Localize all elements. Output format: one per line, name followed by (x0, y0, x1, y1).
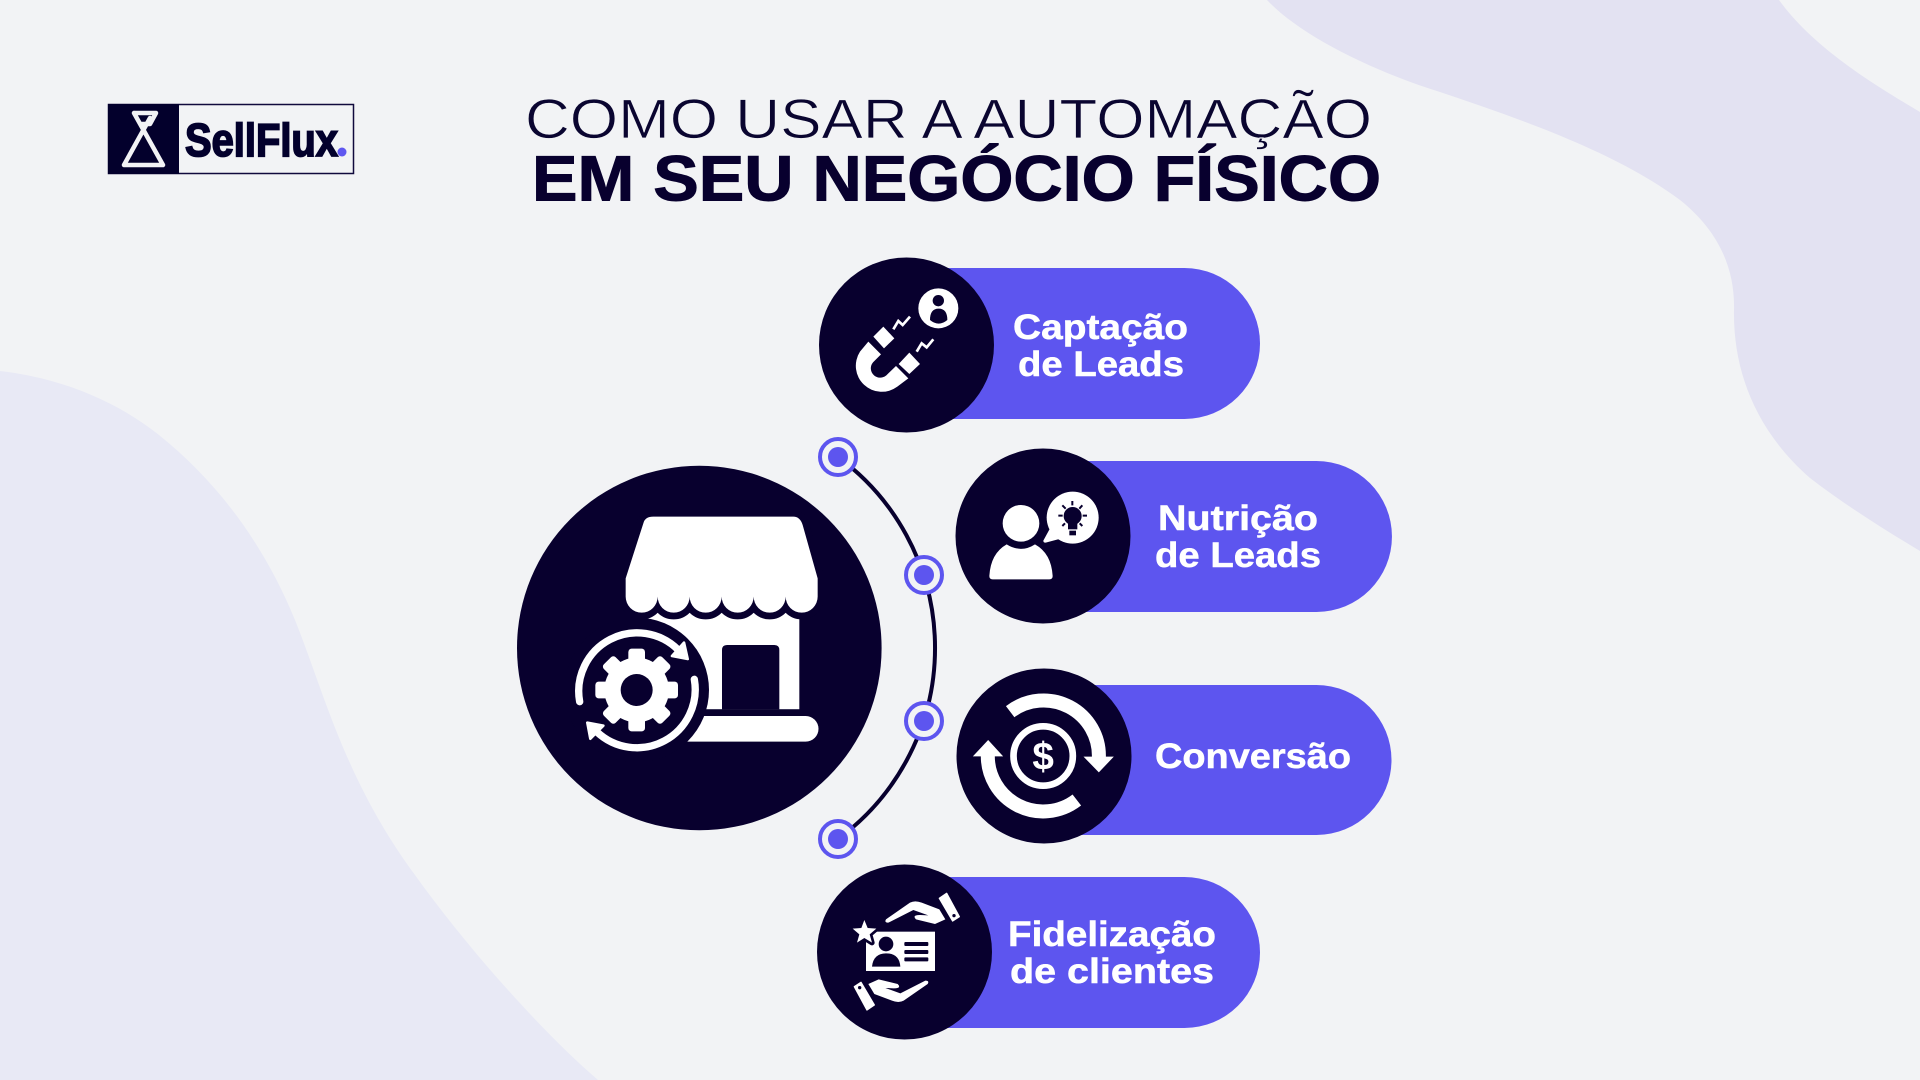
pill: Nutrição de Leads (956, 448, 1392, 624)
central circle: store with gear icon (517, 466, 882, 830)
icon: circular arrows around dollar coin (973, 700, 1114, 811)
pill: Captação de Leads: de Leads (1018, 345, 1184, 384)
pill: Fidelização de clientes: Fidelização (1008, 915, 1216, 954)
icon: magnet attracting person (856, 288, 958, 392)
icon: hands holding loyalty card with star (853, 893, 959, 1010)
title: EM SEU NEGÓCIO FÍSICO (532, 142, 1381, 214)
logo: SellFlux: SellFlux (185, 114, 338, 166)
title: COMO USAR A AUTOMAÇÃO (525, 87, 1372, 150)
pill: Conversão: Conversão (1155, 737, 1351, 776)
pill: Captação de Leads (819, 258, 1260, 432)
pill: Fidelização de clientes: de clientes (1010, 952, 1214, 991)
icon: person with light bulb speech bubble (989, 492, 1099, 579)
pill: Conversão (956, 668, 1392, 844)
pill: Nutrição de Leads: de Leads (1155, 536, 1321, 575)
title (525, 87, 1381, 214)
icon: circular arrows around dollar coin: $ (1032, 735, 1054, 778)
pill: Captação de Leads: Captação (1013, 308, 1188, 347)
logo: SellFlux (108, 104, 354, 174)
pill: Nutrição de Leads: Nutrição (1158, 499, 1318, 538)
timeline arc with nodes (820, 439, 942, 857)
pill: Fidelização de clientes (817, 864, 1260, 1040)
